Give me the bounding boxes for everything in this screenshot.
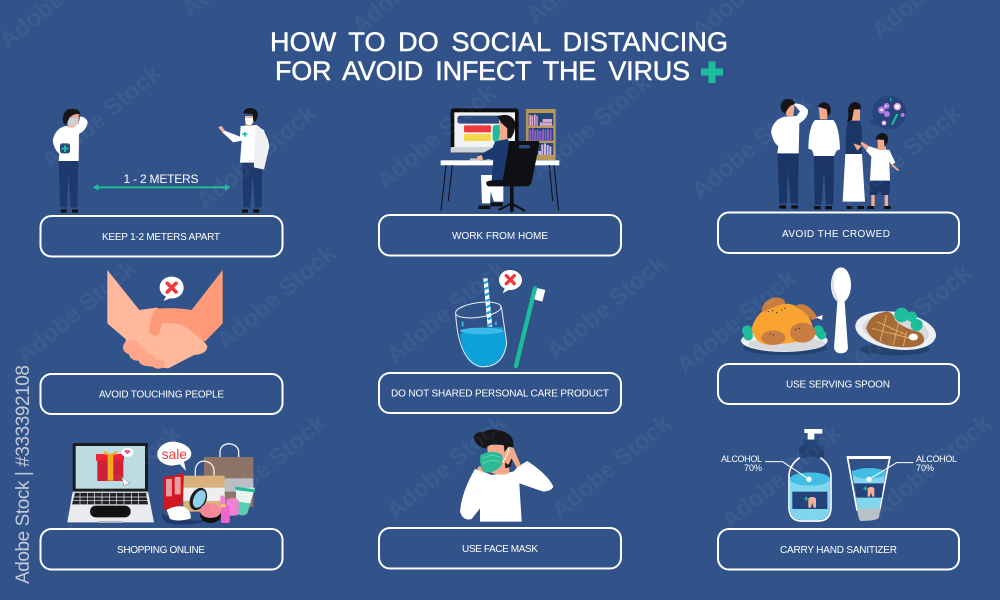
illustration: pump bottle and tube of 70% alcohol gel (765, 429, 913, 521)
label box: KEEP 1-2 METERS APART (102, 232, 220, 243)
panel: avoid touching people (40, 270, 282, 414)
alcohol labels: 70% (744, 463, 762, 473)
illustration: person putting on a face mask (460, 429, 553, 522)
label box (718, 212, 959, 253)
alcohol labels: ALCOHOL (721, 454, 762, 464)
watermark: repeated diagonal stock text: Adobe Stock (672, 264, 802, 380)
label box: AVOID TOUCHING PEOPLE (99, 390, 224, 400)
watermark: repeated diagonal stock text: Adobe Stock (57, 419, 187, 535)
distance label: 1 - 2 METERS (124, 172, 198, 186)
panel: use face mask (379, 429, 621, 568)
label box (40, 529, 282, 570)
alcohol labels: ALCOHOL (916, 454, 957, 464)
panel: shopping online (40, 442, 282, 570)
panel: use serving spoon (718, 267, 959, 404)
watermark: repeated diagonal stock text: Adobe Stock (867, 409, 997, 525)
title (270, 27, 728, 86)
label box (379, 373, 621, 413)
label box (40, 216, 282, 256)
illustration: handshake with red cross bubble (107, 270, 223, 369)
watermark: repeated diagonal stock text: Adobe Stock (12, 254, 142, 370)
illustration: two people standing apart (53, 108, 269, 213)
panel: avoid the crowed (718, 95, 959, 253)
panel: carry hand sanitizer (718, 429, 959, 570)
watermark: repeated diagonal stock text: Adobe Stock (542, 249, 672, 365)
watermark: repeated diagonal stock text: Adobe Stock (547, 409, 677, 525)
panel: keep 1-2 meters apart (40, 108, 282, 256)
illustration: crowd of four people with virus bubble (771, 95, 906, 209)
label box: USE FACE MASK (462, 544, 538, 555)
watermark: repeated diagonal stock text: Adobe Stock (382, 409, 512, 525)
watermark: repeated diagonal stock text: Adobe Stock (527, 69, 657, 185)
label box (718, 529, 959, 570)
panel: work from home (379, 108, 621, 256)
watermark: repeated diagonal stock text: Adobe Stock (717, 419, 847, 535)
watermark: repeated diagonal stock text: Adobe Stock (212, 239, 342, 355)
watermark: repeated diagonal stock text: Adobe Stock (847, 259, 977, 375)
panel: do not share personal care products (379, 270, 621, 413)
label box (40, 374, 282, 414)
watermark: repeated diagonal stock text: Adobe Stock (192, 99, 322, 215)
watermark: repeated diagonal stock text: Adobe Stock (382, 254, 512, 370)
illustration: laptop, shopping bags and cosmetics: sale (162, 446, 187, 462)
label box: WORK FROM HOME (452, 231, 548, 242)
watermark: repeated diagonal stock text: Adobe Stock (372, 79, 502, 195)
watermark: repeated diagonal stock text: Adobe Stock (202, 409, 332, 525)
illustration: laptop, shopping bags and cosmetics (67, 442, 255, 524)
label box: SHOPPING ONLINE (117, 545, 205, 556)
illustration: person at desktop computer (441, 108, 559, 212)
label box (379, 528, 621, 568)
title: HOW TO DO SOCIAL DISTANCING (270, 27, 728, 57)
illustration: roast chicken, spoon and steak (741, 267, 939, 355)
label box: DO NOT SHARED PERSONAL CARE PRODUCT (391, 388, 609, 400)
label box: AVOID THE CROWED (782, 229, 890, 240)
watermark: repeated diagonal stock text: Adobe Stock (837, 99, 967, 215)
label box (718, 364, 959, 404)
label box: CARRY HAND SANITIZER (780, 545, 897, 556)
watermark: repeated diagonal stock text: Adobe Stock (687, 89, 817, 205)
icon: green plus (701, 62, 723, 83)
alcohol labels (721, 454, 957, 473)
label box: USE SERVING SPOON (786, 380, 890, 390)
stock credit: vertical text: Adobe Stock | #333392108 (13, 365, 34, 584)
title: FOR AVOID INFECT THE VIRUS (275, 56, 690, 86)
illustration: glass with straw and toothbrush (455, 270, 545, 367)
label box (379, 215, 621, 256)
watermark: repeated diagonal stock text: Adobe Stock (37, 59, 167, 175)
alcohol labels: 70% (916, 463, 934, 473)
